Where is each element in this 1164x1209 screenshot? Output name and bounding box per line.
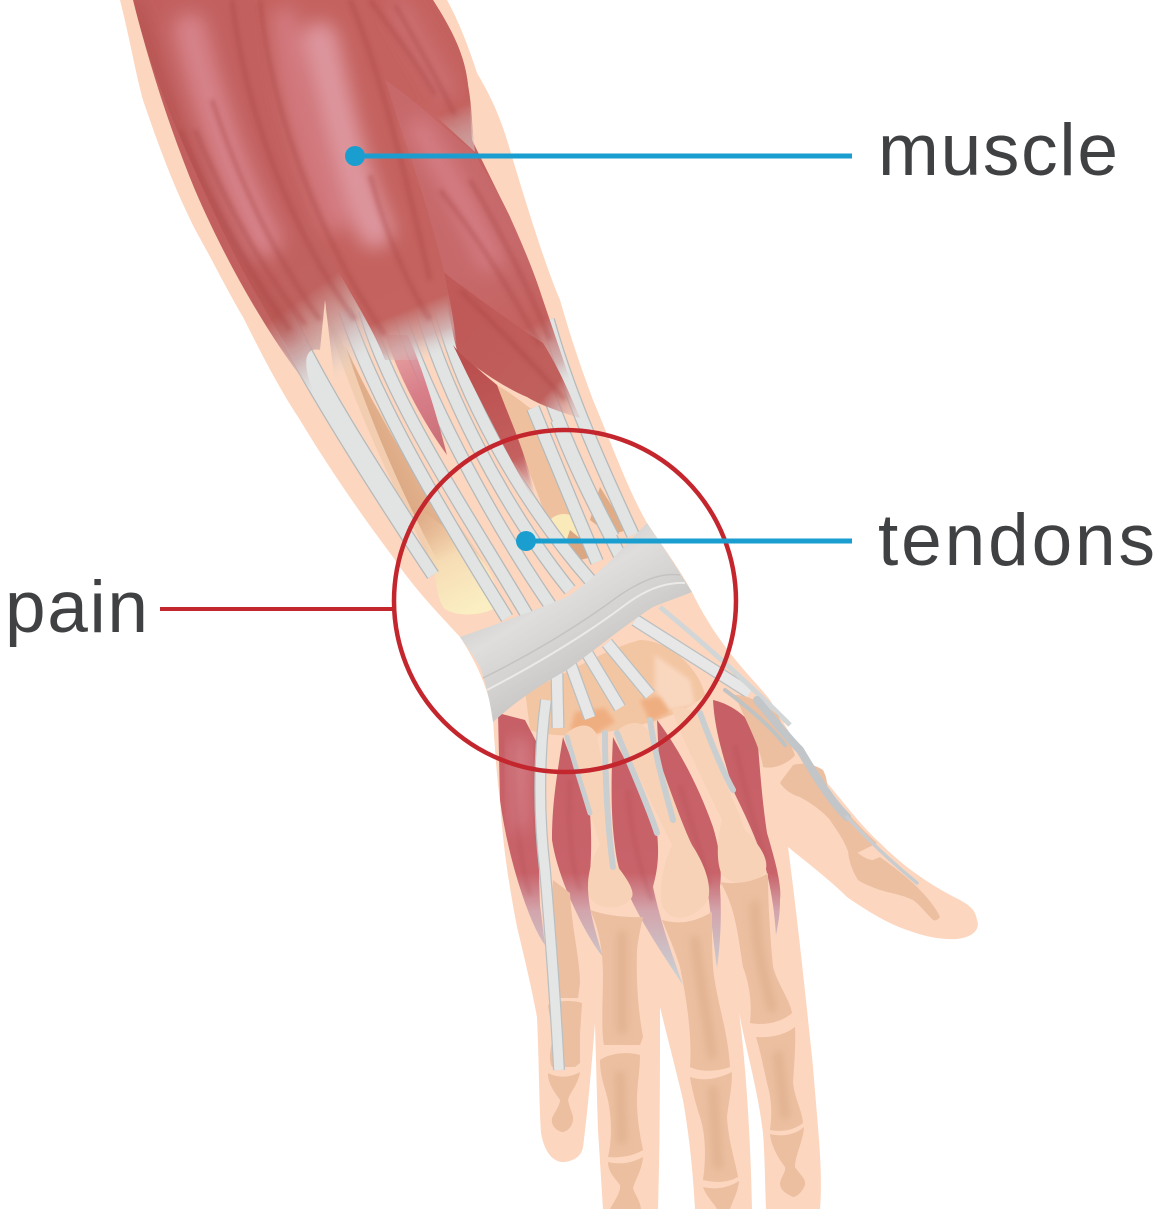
muscle: central flexor bundle	[255, 0, 458, 360]
muscle: forearm muscles	[133, 0, 580, 500]
muscle fibers	[514, 745, 765, 900]
muscle: lower diagonal bundle	[443, 272, 580, 418]
muscle: lower deep bundle	[453, 345, 534, 500]
bone shaft shading	[620, 905, 785, 1165]
callout: muscle: muscle	[878, 110, 1118, 191]
forearm bones	[323, 303, 627, 615]
muscle: back extensor bundle	[345, 0, 475, 152]
hand tendons	[540, 690, 917, 1070]
callout: muscle	[345, 110, 1118, 191]
muscle: base mass behind bundles	[300, 0, 535, 285]
finger 4 bones	[720, 873, 792, 1024]
finger 3 bones	[662, 912, 730, 1071]
muscle: outer flexor bundle	[133, 0, 395, 400]
skin silhouette	[120, 0, 978, 1209]
finger 1 bones	[548, 880, 580, 998]
muscle: diagonal bundle	[380, 77, 575, 395]
finger 2 bones	[590, 910, 643, 1045]
tendons: forearm to wrist	[262, 290, 633, 618]
pain circle	[394, 430, 736, 772]
wrist band: extensor retinaculum	[460, 523, 692, 722]
muscle highlights	[135, 0, 565, 400]
carpal bones and wrist tendons below band	[525, 607, 790, 738]
hand bones	[548, 695, 940, 1209]
hand muscles	[498, 700, 780, 985]
metacarpals	[565, 708, 766, 918]
callout: tendons	[516, 500, 1155, 581]
thumb bones	[735, 695, 795, 768]
callout: pain: pain	[5, 567, 148, 648]
callout: tendons: tendons	[878, 500, 1155, 581]
pink muscle strip between tendons	[385, 335, 447, 455]
